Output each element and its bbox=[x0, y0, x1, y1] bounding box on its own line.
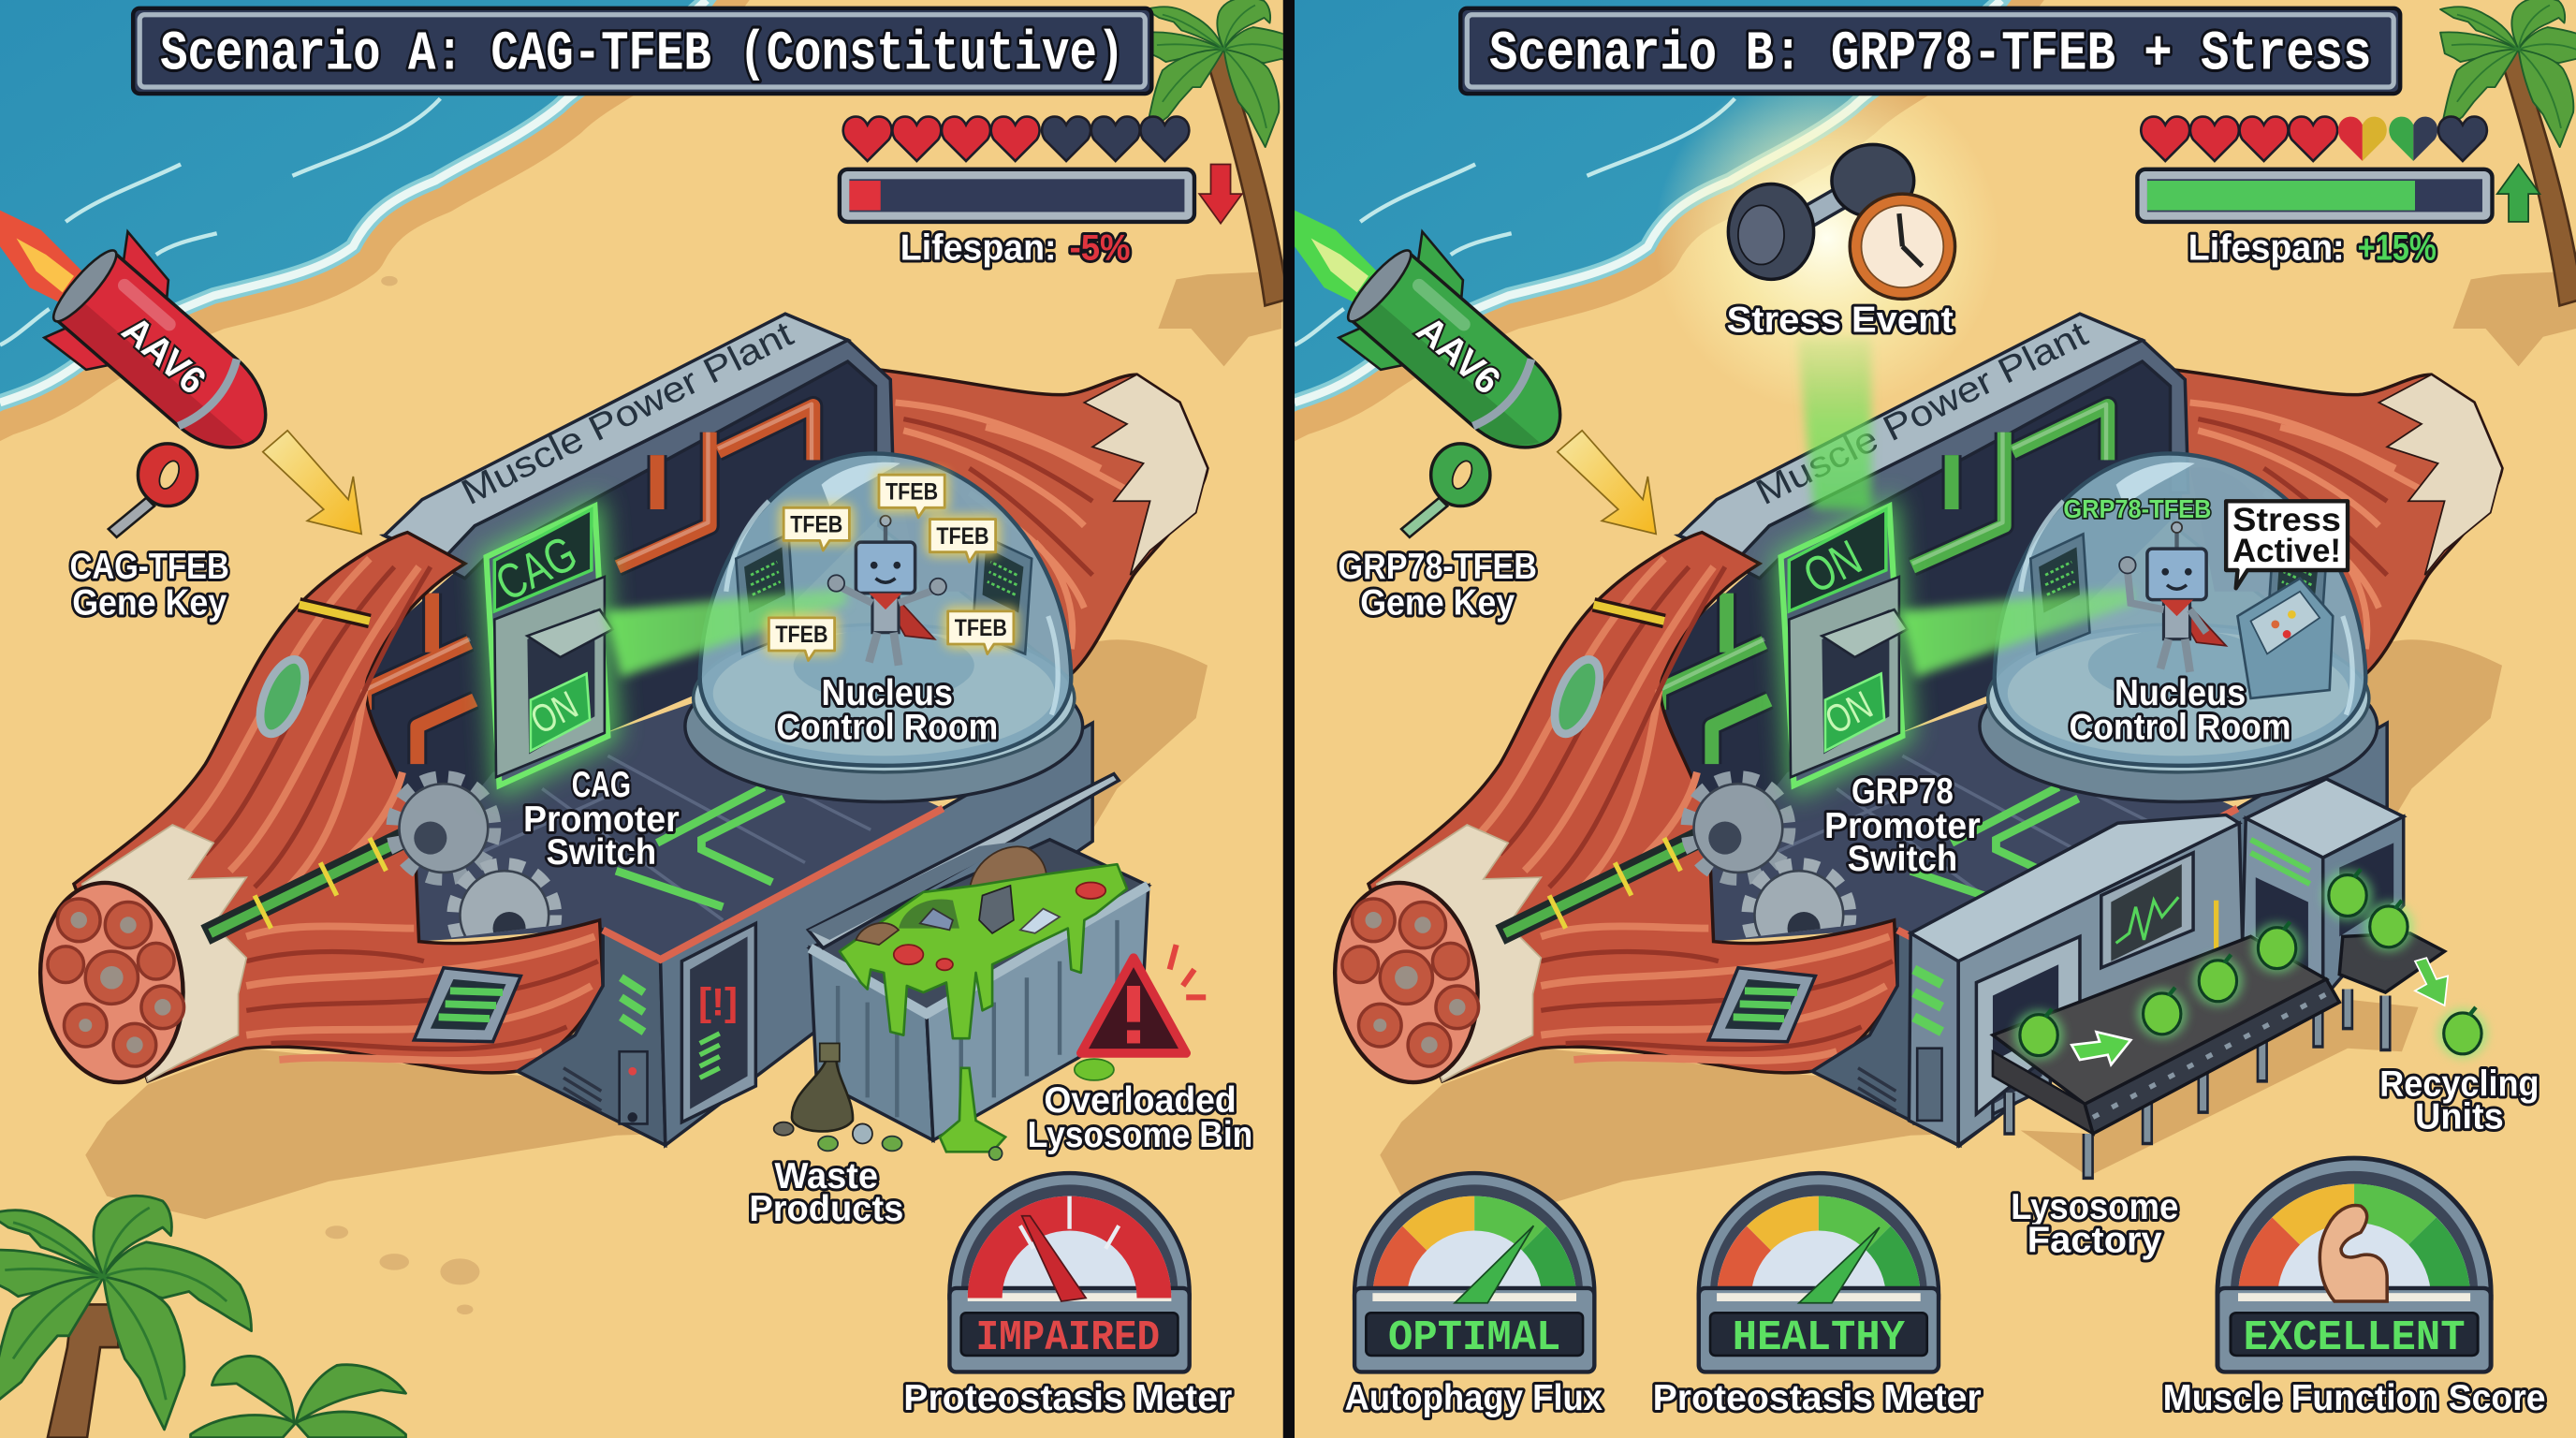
label: Lysosome Factory: Lysosome bbox=[2011, 1187, 2178, 1227]
sand speckles bbox=[326, 276, 479, 1314]
GRP78 promoter switch: ON bbox=[1795, 530, 1870, 605]
label: Recycling Units: Recycling bbox=[2379, 1064, 2539, 1105]
label: Lifespan -5%: -5% bbox=[1070, 227, 1131, 268]
panel: Scenario B bbox=[1229, 0, 2576, 1418]
label: Overloaded Lysosome Bin bbox=[1028, 1080, 1252, 1155]
plant sign: Muscle Power Plant bbox=[455, 314, 799, 513]
gauge: Autophagy Flux optimal bbox=[1354, 1173, 1594, 1372]
label: Lysosome Factory bbox=[2011, 1187, 2178, 1260]
power plant shell bbox=[1647, 314, 2237, 960]
orange pipes bbox=[365, 404, 813, 764]
stress event icon: dumbbell and clock bbox=[1728, 144, 1955, 299]
label: Lifespan -5%: Lifespan: bbox=[900, 227, 1057, 268]
top right palm tree bbox=[2440, 0, 2576, 305]
ocean and shoreline bbox=[0, 0, 755, 435]
delivery arrow bbox=[263, 431, 361, 534]
title banner: Scenario B: Scenario B: GRP78-TFEB + Stress bbox=[1489, 22, 2371, 86]
down arrow bbox=[1199, 165, 1242, 224]
up arrow bbox=[2497, 165, 2539, 222]
label: Nucleus Control Room bbox=[2070, 673, 2291, 748]
speech bubble: Stress Active: Active! bbox=[2232, 533, 2341, 569]
label: Nucleus Control Room bbox=[776, 673, 998, 748]
label: GRP78 Promoter Switch: Promoter bbox=[1824, 806, 1981, 846]
conveyor arrow 1 bbox=[2071, 1032, 2130, 1064]
TFEB bubbles bbox=[764, 470, 1018, 661]
label: GRP78-TFEB: GRP78-TFEB bbox=[2063, 494, 2211, 523]
AAV6 rocket: AAV6 bbox=[114, 307, 214, 403]
muscle back section bbox=[2174, 370, 2502, 677]
control console bbox=[2237, 579, 2333, 698]
label: GRP78-TFEB Gene Key: GRP78-TFEB bbox=[1339, 547, 1537, 587]
muscle back section bbox=[879, 370, 1208, 677]
stress glow and beam bbox=[1654, 66, 1999, 509]
label: CAG Promoter Switch: Promoter bbox=[523, 800, 680, 840]
TFEB robot bbox=[828, 516, 946, 666]
title banner: Scenario A: Scenario A: CAG-TFEB (Constitutive) bbox=[160, 22, 1124, 86]
label: GRP78 Promoter Switch: GRP78 bbox=[1852, 771, 1954, 812]
rocket flame bbox=[0, 211, 82, 304]
overloaded lysosome bin bbox=[809, 774, 1149, 1152]
lifespan hearts bbox=[2141, 117, 2487, 161]
label: GRP78 Promoter Switch bbox=[1824, 771, 1981, 879]
rocket flame bbox=[1295, 211, 1377, 304]
gene key icon bbox=[109, 444, 198, 537]
AAV6 rocket: AAV6 bbox=[1409, 307, 1509, 403]
label: Waste Products: Waste bbox=[775, 1156, 878, 1196]
label: GRP78-TFEB Gene Key: Gene Key bbox=[1360, 582, 1515, 623]
bottom left palm bbox=[0, 1196, 252, 1438]
signal beam bbox=[1899, 588, 2132, 677]
title banner: Scenario B bbox=[1460, 8, 2400, 94]
label: CAG Promoter Switch bbox=[523, 765, 680, 873]
label: Recycling Units bbox=[2379, 1064, 2539, 1137]
gauge: Proteostasis healthy: HEALTHY bbox=[1733, 1313, 1906, 1362]
plant facade bbox=[518, 723, 1092, 1145]
muscle front section bbox=[28, 533, 603, 1092]
title banner: Scenario A bbox=[133, 8, 1151, 94]
waste products bbox=[774, 1043, 1003, 1160]
gauge: Proteostasis impaired bbox=[949, 1173, 1190, 1372]
TFEB bubbles: TFEB bbox=[886, 480, 938, 506]
signal beam bbox=[605, 588, 846, 677]
lifespan bar bbox=[2137, 169, 2492, 222]
label: Nucleus Control Room: Nucleus bbox=[2115, 673, 2246, 713]
label: Lifespan +15%: Lifespan: bbox=[2188, 227, 2345, 268]
label: CAG Promoter Switch: Switch bbox=[547, 832, 656, 873]
label: Lifespan +15%: +15% bbox=[2358, 227, 2437, 268]
gauge: Proteostasis healthy bbox=[1699, 1173, 1939, 1372]
label: Proteostasis Meter: Proteostasis Meter bbox=[903, 1378, 1232, 1418]
label: Recycling Units: Units bbox=[2415, 1097, 2504, 1137]
AAV6 rocket bbox=[1327, 227, 1599, 487]
gene key icon bbox=[1401, 444, 1490, 537]
label: Waste Products: Products bbox=[749, 1189, 903, 1229]
green pipes bbox=[1660, 404, 2108, 764]
TFEB bubbles: TFEB bbox=[936, 524, 989, 550]
ocean and shoreline bbox=[1229, 0, 2050, 435]
label: Nucleus Control Room: Nucleus bbox=[822, 673, 953, 713]
gauge: Muscle Function excellent bbox=[2217, 1158, 2491, 1372]
nucleus dome bbox=[1980, 453, 2378, 801]
speech bubble: Stress Active bbox=[2226, 501, 2348, 588]
conveyor shadow bbox=[2021, 999, 2419, 1177]
label: Nucleus Control Room: Control Room bbox=[776, 708, 998, 748]
label: Waste Products bbox=[749, 1160, 905, 1225]
label: Overloaded Lysosome Bin: Lysosome Bin bbox=[1028, 1115, 1252, 1155]
delivery arrow bbox=[1558, 431, 1656, 534]
CAG promoter switch bbox=[479, 496, 618, 799]
label: Stress Event: Stress Event bbox=[1727, 301, 1954, 341]
TFEB bubbles: TFEB bbox=[790, 513, 842, 538]
plant facade bbox=[1812, 723, 2387, 1145]
GRP78 promoter switch: ON bbox=[1818, 682, 1879, 742]
panel divider bbox=[1283, 0, 1295, 1438]
TFEB bubbles: TFEB bbox=[775, 623, 828, 648]
lysosome factory bbox=[1909, 779, 2445, 1180]
gears bbox=[394, 779, 553, 964]
panel: Scenario A bbox=[0, 0, 1325, 1438]
gears bbox=[1689, 779, 1848, 964]
label: Lifespan +15% bbox=[2188, 227, 2437, 268]
muscle front section bbox=[1323, 533, 1897, 1092]
AAV6 rocket bbox=[41, 228, 268, 449]
TFEB robot bbox=[2119, 522, 2226, 672]
gauge: Proteostasis impaired: IMPAIRED bbox=[976, 1313, 1160, 1362]
lifespan bar bbox=[840, 169, 1194, 222]
plant facade: [!] bbox=[698, 980, 738, 1024]
icon: flexed arm bbox=[2320, 1206, 2387, 1301]
label: Muscle Function Score: Muscle Function Score bbox=[2163, 1378, 2546, 1418]
top right palm tree bbox=[1148, 0, 1283, 307]
label: CAG Promoter Switch: CAG bbox=[572, 765, 631, 805]
nucleus dome bbox=[685, 453, 1083, 801]
gauge: Autophagy Flux optimal: OPTIMAL bbox=[1388, 1313, 1560, 1362]
label: Autophagy Flux: Autophagy Flux bbox=[1345, 1378, 1603, 1418]
sand shadows bbox=[1380, 271, 2576, 1219]
label: Nucleus Control Room: Control Room bbox=[2070, 708, 2291, 748]
conveyor arrow 2 bbox=[2415, 958, 2448, 1005]
small bottom palm bbox=[191, 1356, 406, 1438]
TFEB bubbles: TFEB bbox=[955, 616, 1007, 641]
label: GRP78 Promoter Switch: Switch bbox=[1848, 839, 1957, 879]
recycling units bbox=[2014, 869, 2487, 1060]
CAG promoter switch: ON bbox=[523, 682, 584, 742]
warning icon bbox=[1075, 945, 1206, 1080]
lifespan hearts bbox=[843, 117, 1189, 161]
power plant shell bbox=[353, 314, 943, 960]
GRP78 promoter switch bbox=[1775, 496, 1912, 799]
label: Proteostasis Meter: Proteostasis Meter bbox=[1653, 1378, 1982, 1418]
CAG promoter switch: CAG bbox=[488, 525, 585, 612]
plant sign: Muscle Power Plant bbox=[1749, 314, 2094, 513]
label: Lifespan -5% bbox=[900, 227, 1131, 268]
label: CAG-TFEB Gene Key: Gene Key bbox=[72, 582, 227, 623]
label: GRP78-TFEB Gene Key bbox=[1339, 547, 1537, 623]
gauge: Muscle Function excellent: EXCELLENT bbox=[2244, 1313, 2466, 1362]
label: Overloaded Lysosome Bin: Overloaded bbox=[1044, 1080, 1237, 1121]
label: CAG-TFEB Gene Key bbox=[70, 547, 229, 623]
sand shadows bbox=[85, 271, 1281, 1219]
label: CAG-TFEB Gene Key: CAG-TFEB bbox=[70, 547, 229, 587]
label: Lysosome Factory: Factory bbox=[2027, 1220, 2162, 1260]
speech bubble: Stress Active: Stress bbox=[2232, 502, 2341, 538]
